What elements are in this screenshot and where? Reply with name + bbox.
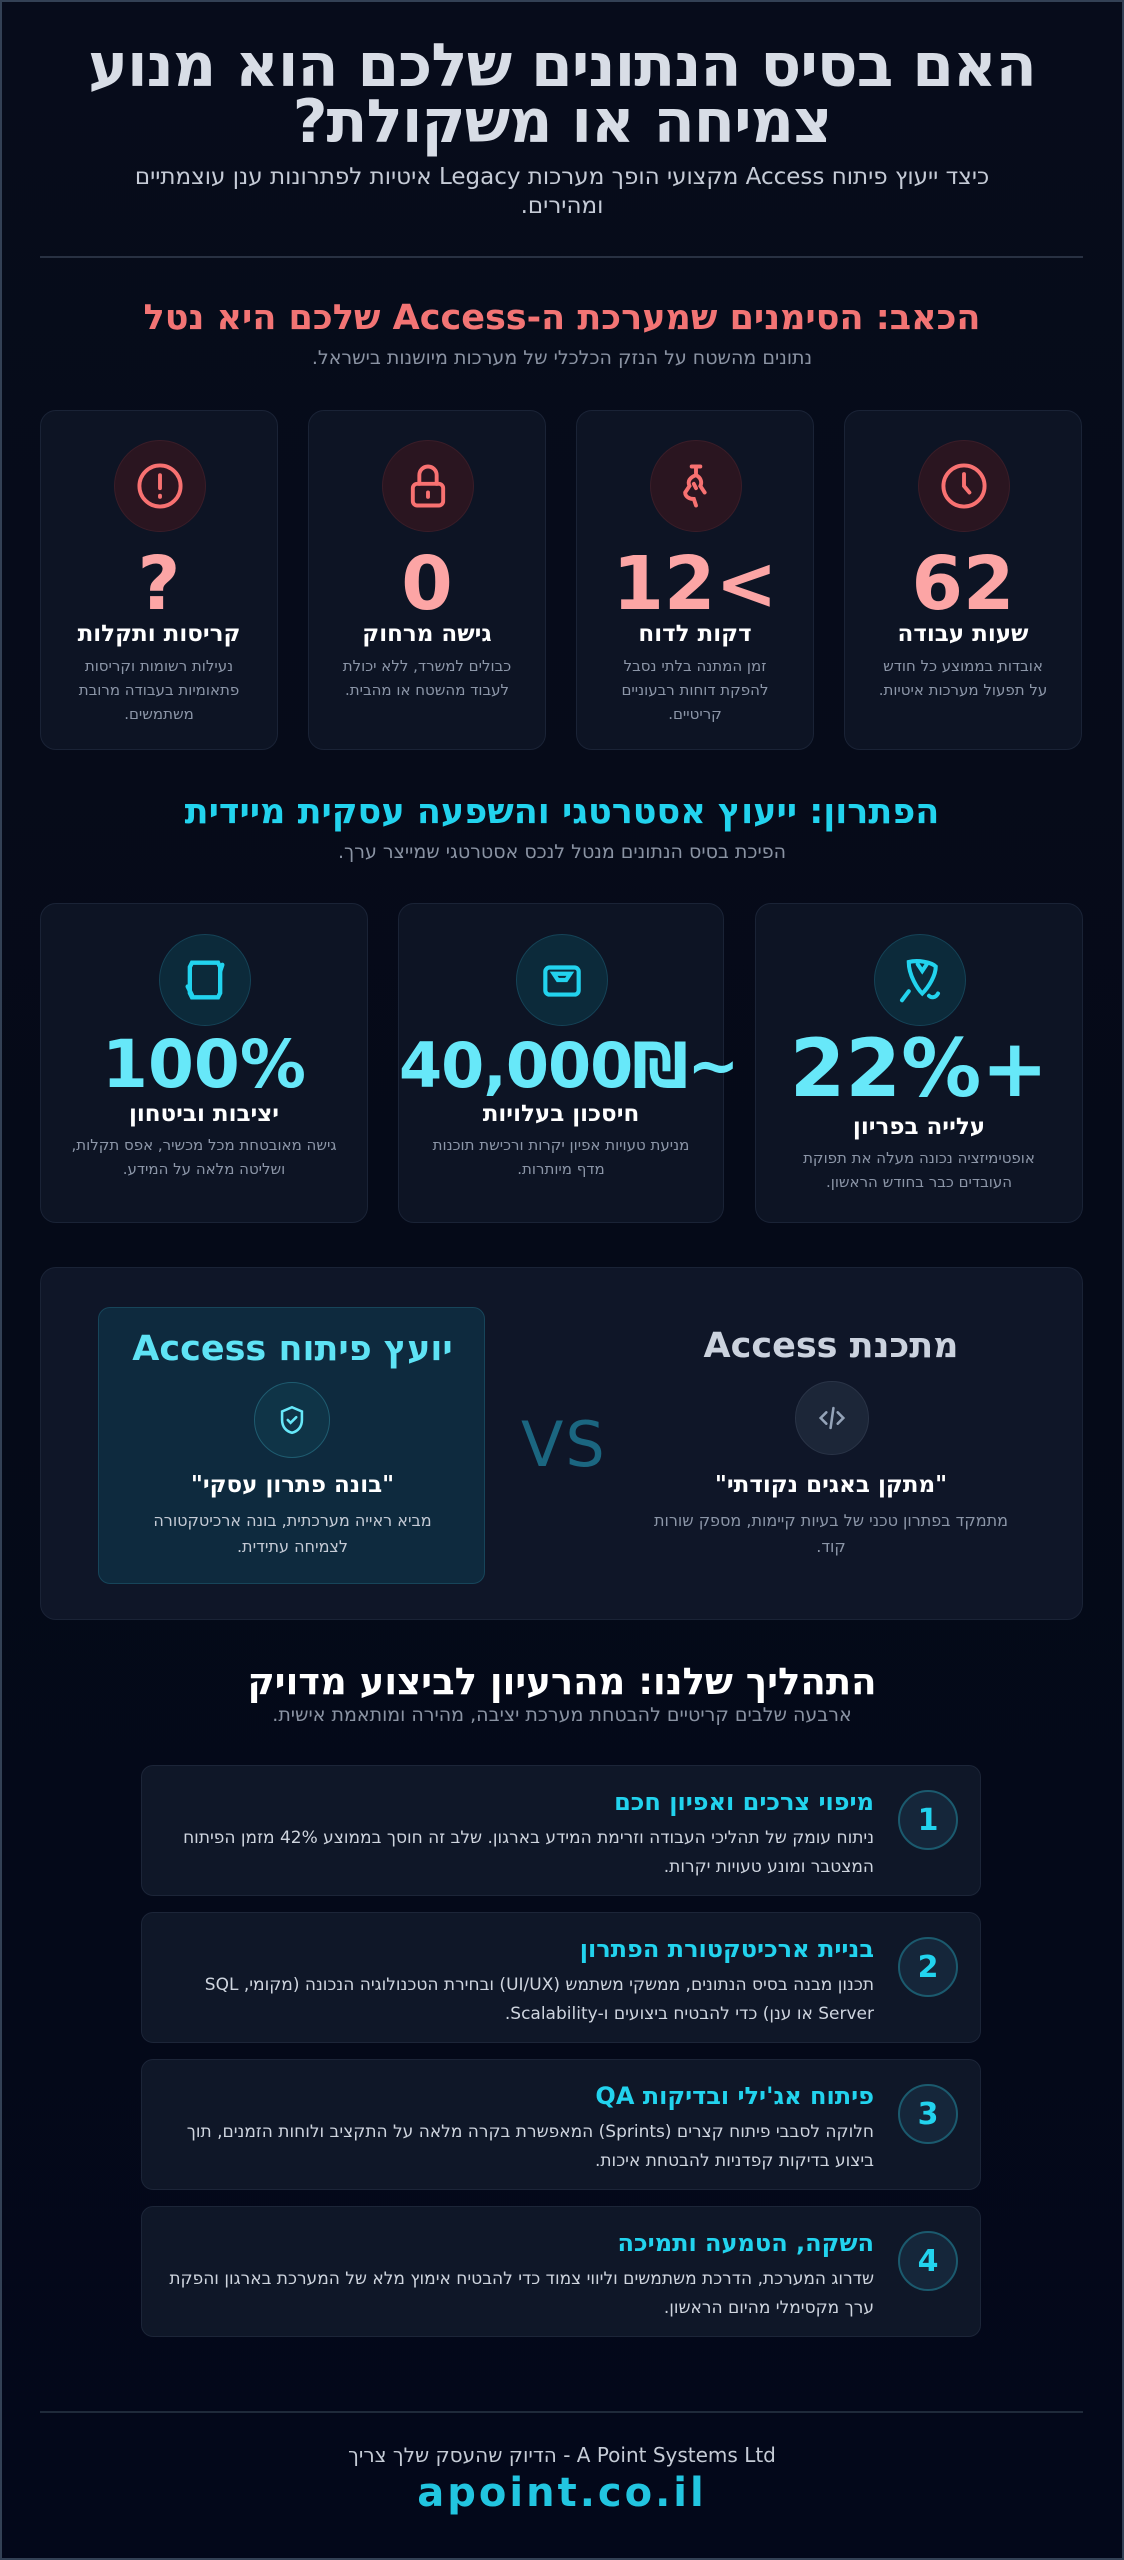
panel: savings: מניעת טעויות אפיון יקרות ורכישת תוכנות מדף מיותרות. [433, 1136, 689, 1178]
step 1: מיפוי צרכים ואפיון חכם [614, 1788, 874, 1816]
panel: remote access: כבולים למשרד, ללא יכולת לעבוד מהשטח או מהבית. [343, 657, 511, 699]
panel: comparison [40, 1267, 1083, 1620]
heading: solution: הפתרון: ייעוץ אסטרטגי והשפעה עסקית מיידית [185, 792, 939, 832]
panel: report minutes [576, 410, 814, 750]
subheading: solution: הפיכת בסיס הנתונים מנטל לנכס אסטרטגי שמייצר ערך. [338, 841, 786, 863]
panel: remote access [308, 410, 546, 750]
icon: wallet [516, 934, 608, 1026]
heading: consultant: יועץ פיתוח Access [132, 1329, 453, 1369]
title [88, 31, 1036, 157]
icon: shield [254, 1382, 330, 1458]
panel: savings: 40,000₪~ [399, 1029, 738, 1102]
icon: clock [918, 440, 1010, 532]
panel: report minutes: זמן המתנה בלתי נסבל להפקת דוחות רבעוניים קריטיים. [621, 657, 769, 723]
step 4: השקה, הטמעה ותמיכה [618, 2229, 874, 2257]
step 2 [141, 1912, 981, 2043]
step 1: 1 [918, 1802, 938, 1838]
heading: process: התהליך שלנו: מהרעיון לביצוע מדויק [247, 1660, 877, 1703]
panel: crashes: נעילות רשומות וקריסות פתאומיות בעבודה מרובת משתמשים. [79, 657, 239, 723]
panel: work hours: שעות עבודה [898, 621, 1028, 647]
subtitle: כיצד ייעוץ פיתוח Access מקצועי הופך מערכות Legacy איטיות לפתרונות ענן עוצמתיים ומהירים. [135, 164, 989, 219]
step 3: חלוקה לסבבי פיתוח קצרים (Sprints) המאפשרת בקרה מלאה על התקציב ולוחות הזמנים, תוך ביצוע בדיקות קפדניות להבטחת איכות. [187, 2122, 874, 2171]
panel: productivity: אופטימיזציה נכונה מעלה את תפוקת העובדים כבר בחודש הראשון. [803, 1149, 1035, 1191]
step 2: בניית ארכיטקטורת הפתרון [580, 1935, 874, 1963]
column: programmer [654, 1326, 1008, 1556]
heading: problem: הכאב: הסימנים שמערכת ה-Access שלכם היא נטל [144, 298, 980, 338]
column: programmer: מתמקד בפתרון טכני של בעיות קיימות, מספק שורות קוד. [654, 1511, 1008, 1556]
panel: productivity: 22%+ [790, 1022, 1048, 1115]
panel: stability [40, 903, 368, 1223]
step 4: 4 [918, 2244, 938, 2278]
subheading: process: ארבעה שלבים קריטיים להבטחת מערכת יציבה, מהירה ומותאמת אישית. [272, 1704, 852, 1726]
panel: report minutes: דקות לדוח [638, 621, 752, 647]
panel: crashes: ? [138, 541, 180, 627]
step 4 [141, 2206, 981, 2337]
panel: crashes: קריסות ותקלות [78, 621, 240, 647]
panel: report minutes: 12< [612, 541, 777, 627]
step 3: פיתוח אג'ילי ובדיקות QA [595, 2082, 874, 2110]
panel: remote access: גישה מרחוק [362, 621, 492, 647]
step 2: 2 [918, 1950, 938, 1984]
panel: work hours: אובדות בממוצע כל חודש על תפעול מערכות איטיות. [879, 657, 1047, 699]
step 2: תכנון מבנה בסיס הנתונים, ממשקי משתמש (UI/UX) ובחירת הטכנולוגיה הנכונה (מקומי, SQL Server או ענן) כדי להבטיח ביצועים ו-Scalability. [205, 1975, 874, 2024]
quote: consultant: "בונה פתרון עסקי" [191, 1472, 394, 1498]
icon: frame [159, 934, 251, 1026]
subheading: problem: נתונים מהשטח על הנזק הכלכלי של מערכות מיושנות בישראל. [312, 347, 812, 369]
step 1 [141, 1765, 981, 1896]
icon: rocket [874, 934, 966, 1026]
icon: alert [114, 440, 206, 532]
footer tagline: A Point Systems Ltd - הדיוק שהעסק שלך צריך [348, 2443, 776, 2467]
step 1: ניתוח עומק של תהליכי העבודה וזרימת המידע בארגון. שלב זה חוסך בממוצע 42% מזמן הפיתוח המצטבר ומונע טעויות יקרות. [183, 1828, 874, 1877]
heading: programmer: מתכנת Access [704, 1326, 958, 1366]
footer url: apoint.co.il [417, 2470, 707, 2516]
title: צמיחה או משקולת? [293, 87, 831, 157]
column: consultant [98, 1307, 485, 1584]
step 3: 3 [918, 2096, 938, 2132]
title: האם בסיס הנתונים שלכם הוא מנוע [88, 31, 1036, 101]
panel: remote access: 0 [401, 541, 453, 627]
quote: programmer: "מתקן באגים נקודתי" [715, 1472, 947, 1498]
panel: stability: יציבות וביטחון [129, 1101, 279, 1127]
panel: productivity [755, 903, 1083, 1223]
panel: stability: גישה מאובטחת מכל מכשיר, אפס תקלות, ושליטה מלאה על המידע. [71, 1136, 336, 1178]
label: VS: VS [521, 1408, 607, 1481]
panel: savings: חיסכון בעלויות [483, 1101, 639, 1127]
panel: savings [398, 903, 724, 1223]
icon: code [795, 1381, 869, 1455]
panel: crashes [40, 410, 278, 750]
panel: productivity: עלייה בפריון [853, 1114, 985, 1140]
icon: lock [382, 440, 474, 532]
panel: work hours [844, 410, 1082, 750]
panel: stability: 100% [102, 1026, 306, 1103]
panel: work hours: 62 [912, 541, 1014, 627]
column: consultant: מביא ראייה מערכתית, בונה ארכיטקטורה לצמיחה עתידית. [153, 1511, 432, 1556]
step 4: שדרוג המערכת, הדרכת משתמשים וליווי צמוד כדי להבטיח אימוץ מלא של המערכת בארגון והפקת ערך מקסימלי מהיום הראשון. [169, 2269, 874, 2318]
step 3 [141, 2059, 981, 2190]
icon: hourglass [650, 440, 742, 532]
